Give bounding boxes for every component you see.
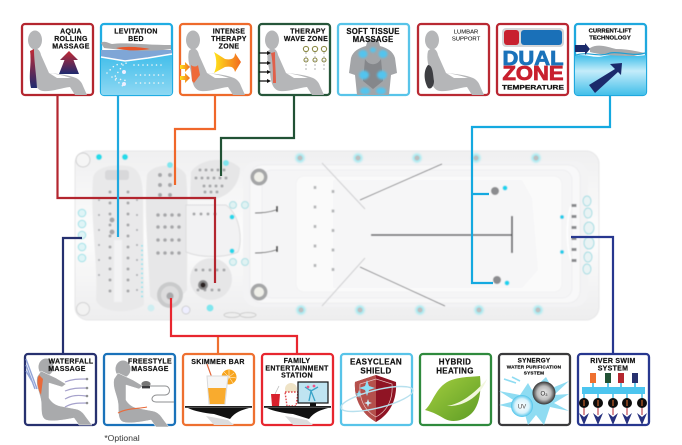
panel: dual zone temperature [497,24,568,95]
heading: ZONE [219,44,239,50]
heading: MASSAGE [48,366,86,373]
icon: manifold with jets and arrows [579,373,647,425]
heading: SUPPORT [452,36,481,42]
seat jets [99,170,232,300]
panel: aqua rolling massage [22,24,93,95]
panel: waterfall massage [25,354,96,425]
panel: current-lift technology [575,24,646,95]
icon: figure under waterfall [26,358,92,425]
line: waterfall massage [63,238,82,353]
heading: BED [128,36,144,43]
heading: WATERFALL [49,358,93,366]
icon: swimmer lifted by current [575,43,646,95]
big pillow jets [198,168,277,300]
heading: ENTERTAINMENT [265,365,329,372]
lighted perimeter jets [296,154,542,314]
icon: UV and ozone spheres [499,377,569,425]
heading: LUMBAR [454,30,478,36]
heading: SYSTEM [524,370,544,376]
icon: seated figure with rolling massage [28,30,87,95]
swim spa tub [75,151,599,320]
panel: therapy wave zone [259,24,330,95]
connector lines [58,96,613,353]
panel: synergy water purification system [499,354,570,425]
heading: SHIELD [360,366,392,376]
icon: figure with massage hose [114,360,174,427]
panel: river swim system [578,354,649,425]
river swim outlets [567,196,594,274]
heading: WATER PURIFICATION [507,364,562,370]
caption: TEMPERATURE [502,86,564,92]
line: current-lift technology [472,96,610,283]
panel: family entertainment station [262,354,333,425]
heading: INTENSE [213,28,245,36]
heading: HYBRID [439,358,471,366]
heading: STATION [281,373,313,380]
line: aqua rolling massage [58,96,215,283]
heading: SOFT TISSUE [346,27,400,36]
heading: TECHNOLOGY [589,36,631,42]
current jets [491,186,564,285]
icon: seated figure with heat arrows [180,30,245,95]
heading: ROLLING [54,36,88,43]
heading: THERAPY [290,28,326,36]
line: river swim system [571,237,613,353]
icon: zone indicators [502,28,564,47]
logo text: DUAL [502,48,564,70]
footnote: *Optional [104,433,140,443]
icon: seated figure with lumbar pad [425,30,484,95]
icon: green leaf [425,376,487,421]
heading: FAMILY [284,358,310,365]
waterfall lights [78,209,86,262]
heading: LEVITATION [114,28,158,36]
heading: THERAPY [211,36,247,43]
tub shell [75,151,599,320]
panel: skimmer bar [183,354,254,425]
heading: SKIMMER BAR [191,359,245,366]
heading: RIVER SWIM [590,358,636,365]
logo text: ZONE [502,63,564,85]
heading: MASSAGE [353,35,393,44]
heading: MASSAGE [131,366,169,373]
heading: SYNERGY [518,358,550,364]
panel: easyclean shield [339,354,415,425]
heading: SYSTEM [598,366,628,372]
heading: MASSAGE [52,44,90,50]
spa seating area [76,153,256,318]
line: family entertainment station [171,298,297,353]
heading: AQUA [60,28,82,36]
sphere label: ozone: O₃ [540,392,548,398]
heading: HEATING [436,366,474,376]
panel: freestyle massage [104,354,175,427]
icon: drink on tray [185,364,252,425]
icon: seated figure with wave jets [259,30,327,95]
icon: drink, popcorn and screen on tray [264,382,331,425]
sphere label: UV: UV [518,404,526,410]
icon: muscular back [349,39,397,95]
panel: intense therapy zone [180,24,251,95]
line: skimmer bar [217,336,219,353]
line: therapy wave zone [221,96,294,176]
panel: levitation bed [101,24,172,95]
icon: shield with sparkles [339,375,415,422]
entertainment station dial [157,282,183,308]
panel: lumbar support [418,24,489,95]
icon: body on water bed [101,42,172,95]
heading: EASYCLEAN [350,358,402,366]
line: intense therapy zone [175,96,215,185]
swim area [243,161,588,307]
heading: FREESTYLE [128,358,172,366]
heading: WAVE ZONE [284,36,328,43]
heading: CURRENT-LIFT [589,28,631,34]
panel: hybrid heating [420,354,491,425]
line: levitation bed [117,96,119,237]
panel: soft tissue massage [338,24,409,95]
